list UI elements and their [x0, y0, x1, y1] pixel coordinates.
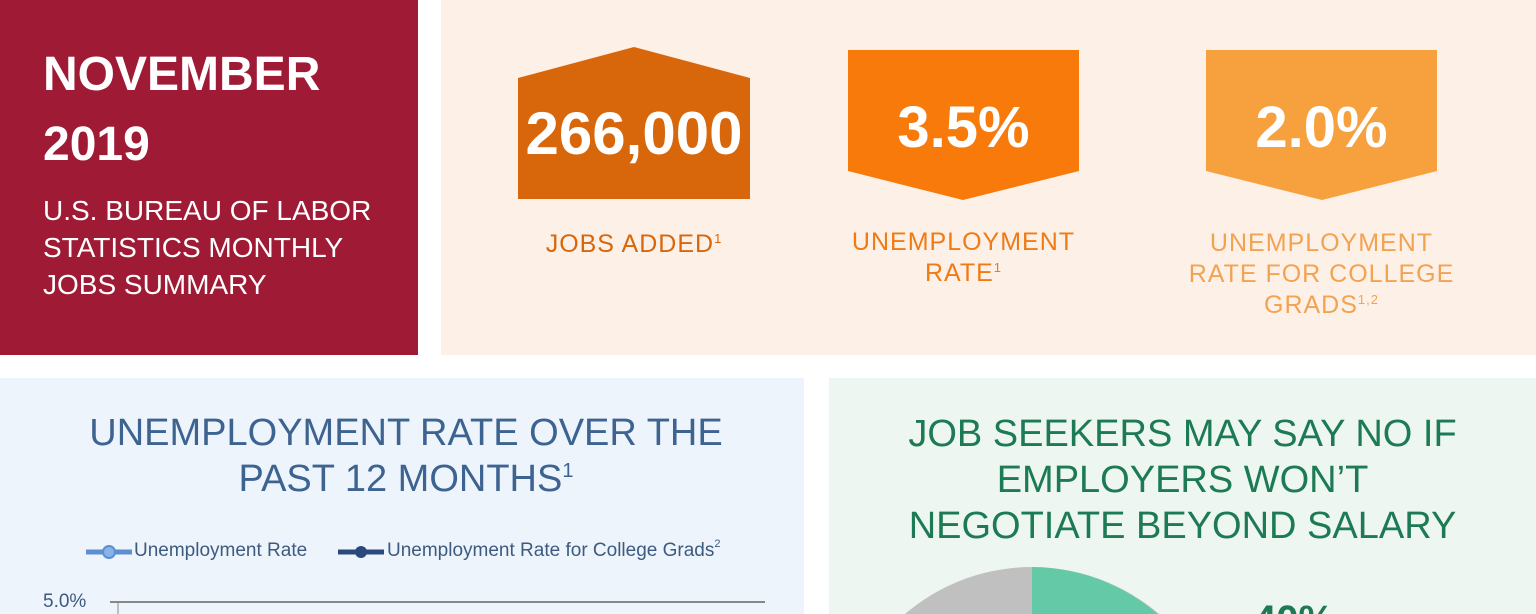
- chart heading: UNEMPLOYMENT RATE OVER THE: [89, 412, 723, 454]
- pie chart: [905, 567, 1159, 614]
- heading: JOB SEEKERS MAY SAY NO IF: [908, 413, 1457, 455]
- stat: college grads rate: UNEMPLOYMENT: [1210, 229, 1433, 257]
- chart heading: PAST 12 MONTHS1: [239, 458, 573, 500]
- heading: [908, 413, 1457, 547]
- stat: unemployment rate: RATE1: [925, 259, 1002, 287]
- stat: jobs added: 266,000: [526, 100, 742, 167]
- heading: EMPLOYERS WON’T: [997, 459, 1368, 501]
- panel: title block: [0, 0, 418, 355]
- legend: Unemployment Rate: [134, 540, 307, 561]
- y axis label: 5.0%: [43, 591, 86, 612]
- legend: Unemployment Rate for College Grads2: [387, 538, 720, 561]
- panel: negotiation: [829, 378, 1536, 614]
- stat: unemployment rate: 3.5%: [897, 95, 1030, 160]
- title: NOVEMBER: [43, 48, 320, 101]
- stat: college grads rate: 2.0%: [1255, 95, 1388, 160]
- subtitle: JOBS SUMMARY: [43, 269, 267, 300]
- heading: NEGOTIATE BEYOND SALARY: [909, 505, 1456, 547]
- stat: unemployment rate: [848, 50, 1079, 287]
- stat: college grads rate: GRADS1,2: [1264, 291, 1379, 319]
- stat: jobs added: [518, 47, 750, 258]
- legend: [86, 538, 720, 561]
- stat: college grads rate: RATE FOR COLLEGE: [1189, 260, 1454, 288]
- stat: unemployment rate: UNEMPLOYMENT: [852, 228, 1075, 256]
- panel: unemployment chart: [0, 378, 804, 614]
- title: [43, 48, 320, 171]
- stat: jobs added: JOBS ADDED1: [546, 230, 722, 258]
- subtitle: U.S. BUREAU OF LABOR: [43, 195, 371, 226]
- stat: college grads rate: [1189, 50, 1454, 319]
- chart axes: [110, 601, 765, 614]
- chart heading: [89, 412, 723, 500]
- subtitle: [43, 195, 371, 300]
- subtitle: STATISTICS MONTHLY: [43, 232, 343, 263]
- title: 2019: [43, 118, 150, 171]
- panel: key stats: [441, 0, 1536, 355]
